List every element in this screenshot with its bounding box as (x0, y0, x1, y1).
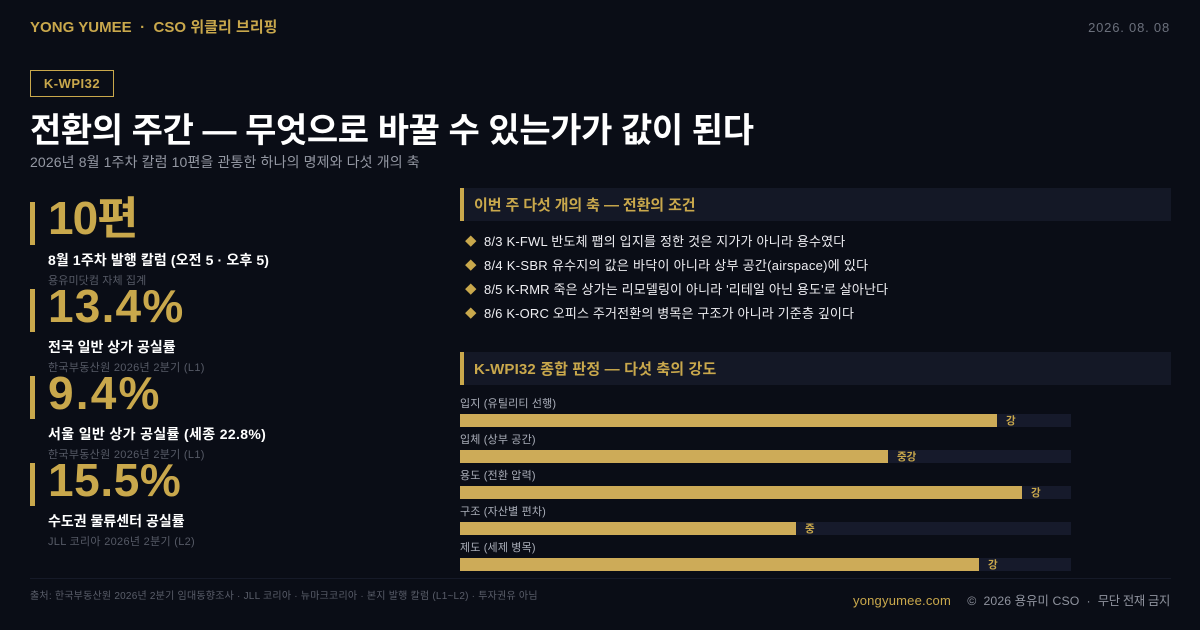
stat: 10 columns: 용유미닷컴 자체 집계 (48, 275, 146, 287)
bar: regulation: 강 (988, 559, 998, 571)
stat: Seoul vacancy: 한국부동산원 2026년 2분기 (L1) (48, 449, 205, 461)
bar: volume: 입체 (상부 공간) (460, 434, 536, 446)
section heading: verdict (460, 352, 1171, 385)
bullet 8/6: 8/6 K-ORC 오피스 주거전환의 병목은 구조가 아니라 기준층 깊이다 (484, 306, 854, 321)
bullet 8/3: 8/3 K-FWL 반도체 팹의 입지를 정한 것은 지가가 아니라 용수였다 (484, 234, 845, 249)
bar: location: 입지 (유틸리티 선행) (460, 398, 556, 410)
title: 전환의 주간 — 무엇으로 바꿀 수 있는가가 값이 된다 (30, 112, 754, 150)
tag badge (30, 70, 114, 97)
stat: Seoul vacancy (30, 367, 266, 461)
bar: structure: 구조 (자산별 편차) (460, 506, 546, 518)
header brand: YONG YUMEE · CSO 위클리 브리핑 (30, 19, 278, 36)
bar: regulation (460, 542, 1071, 571)
section heading: verdict: K-WPI32 종합 판정 — 다섯 축의 강도 (474, 361, 716, 378)
section heading: five axes: 이번 주 다섯 개의 축 — 전환의 조건 (474, 197, 695, 214)
bar: volume (460, 434, 1071, 463)
stat: Seoul vacancy: 서울 일반 상가 공실률 (세종 22.8%) (48, 426, 266, 442)
bar: use: 강 (1031, 487, 1041, 499)
bar: use (460, 470, 1071, 499)
stat: logistics vacancy: 15.5% (48, 454, 181, 506)
bar: structure: 중 (805, 523, 815, 535)
footer source note: 출처: 한국부동산원 2026년 2분기 임대동향조사 · JLL 코리아 · 뉴마크코리아 · 본지 발행 칼럼 (L1~L2) · 투자권유 아님 (30, 591, 538, 602)
stat: logistics vacancy: 수도권 물류센터 공실률 (48, 513, 185, 529)
footer copyright: © 2026 용유미 CSO · 무단 전재 금지 (967, 594, 1170, 608)
bullet 8/5: 8/5 K-RMR 죽은 상가는 리모델링이 아니라 '리테일 아닌 용도'로 살아난다 (484, 282, 888, 297)
header date: 2026. 08. 08 (1088, 20, 1170, 35)
subtitle: 2026년 8월 1주차 칼럼 10편을 관통한 하나의 명제와 다섯 개의 축 (30, 154, 420, 170)
bar: volume: 중강 (897, 451, 916, 463)
bar: location: 강 (1006, 415, 1016, 427)
tag badge: K-WPI32 (44, 76, 100, 91)
bullet 8/4: 8/4 K-SBR 유수지의 값은 바닥이 아니라 상부 공간(airspace)에 있다 (484, 258, 868, 273)
bar: use: 용도 (전환 압력) (460, 470, 536, 482)
section heading: five axes (460, 188, 1171, 221)
stat: logistics vacancy: JLL 코리아 2026년 2분기 (L2) (48, 536, 195, 548)
stat: national vacancy: 전국 일반 상가 공실률 (48, 339, 176, 355)
stat: national vacancy: 한국부동산원 2026년 2분기 (L1) (48, 362, 205, 374)
stat: 10 columns (30, 192, 269, 287)
stat: logistics vacancy (30, 454, 195, 548)
bar: location (460, 398, 1071, 427)
stat: national vacancy: 13.4% (48, 280, 184, 332)
footer site link: yongyumee.com (853, 593, 951, 608)
stat: Seoul vacancy: 9.4% (48, 367, 162, 419)
stat: 10 columns: 10편 (48, 192, 139, 244)
bar: regulation: 제도 (세제 병목) (460, 542, 536, 554)
stat: national vacancy (30, 280, 205, 374)
bar: structure (460, 506, 1071, 535)
stat: 10 columns: 8월 1주차 발행 칼럼 (오전 5 · 오후 5) (48, 252, 269, 268)
